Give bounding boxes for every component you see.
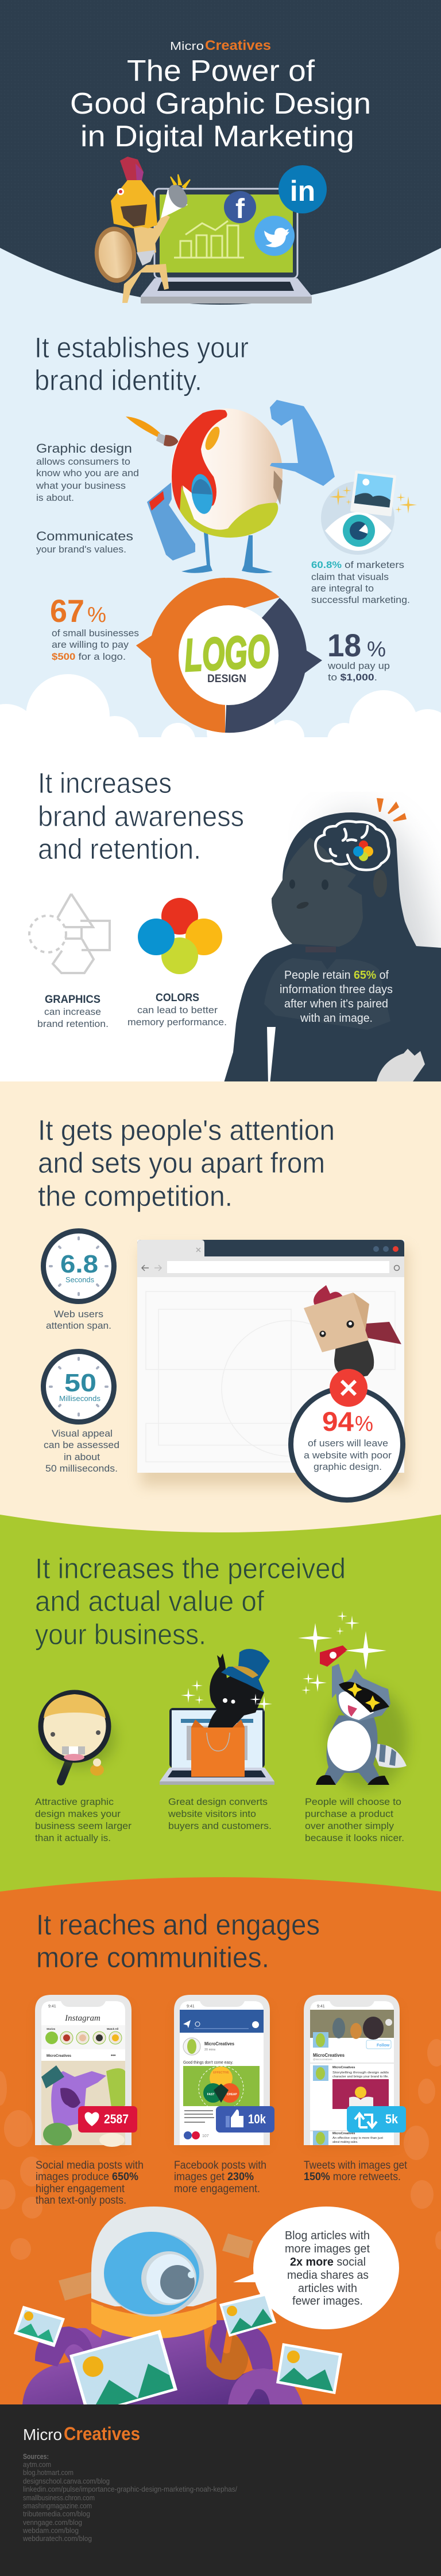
phone: facebook: CHEAP [227, 2093, 237, 2096]
phone: twitter: MicroCreatives [332, 2066, 355, 2069]
phone: twitter [304, 1995, 400, 2145]
text: social media posts: than text-only posts. [36, 2194, 126, 2207]
text: visual appeal: can be assessed [44, 1439, 119, 1450]
icon: gorilla with brain [223, 812, 441, 1090]
heading [34, 332, 249, 396]
text: visual appeal: Visual appeal [52, 1428, 113, 1439]
section background [0, 1081, 441, 1540]
phone: facebook [174, 1995, 270, 2145]
text: people retain 65% [280, 969, 393, 1025]
badge: thumbs up: 10k [248, 2112, 266, 2126]
phone: twitter: MicroCreatives [313, 2052, 345, 2058]
title: The Power of [127, 55, 315, 88]
logo: MicroCreatives: Creatives [205, 38, 271, 53]
text: colors: COLORS [156, 992, 199, 1004]
phone: facebook: 20 mins [204, 2048, 216, 2052]
speech bubble: blog articles: articles with [298, 2282, 357, 2295]
text: visual appeal: 50 milliseconds. [45, 1463, 118, 1474]
logo: MicroCreatives: Micro [170, 40, 204, 53]
sources list: webduratech.com/blog [22, 2534, 92, 2543]
panel: footer [0, 2404, 441, 2576]
text: people will choose [305, 1796, 404, 1843]
footer logo [23, 2423, 140, 2444]
text: graphic design: know who you are and [36, 468, 139, 478]
heading: brand identity. [34, 364, 202, 396]
heading: It increases the perceived [35, 1552, 346, 1585]
badge: retweets [347, 2106, 406, 2133]
phone: facebook: 107 [202, 2134, 209, 2138]
sources list: aytm.com [23, 2460, 51, 2469]
text: attractive graphic design: design makes your [35, 1808, 121, 1819]
text: graphic design: Graphic design [36, 441, 132, 456]
heading: It gets people's attention [38, 1114, 335, 1146]
clock: 6.8 seconds: Seconds [65, 1275, 94, 1284]
phone: instagram: Instagram [64, 2014, 100, 2023]
speech bubble: blog articles: fewer images. [292, 2295, 363, 2307]
icon: linkedin [278, 165, 327, 213]
icon: facebook [224, 191, 256, 224]
icon: laptop with shopping bag [160, 1649, 274, 1785]
text: great design converts: buyers and customers. [168, 1820, 272, 1831]
stat: 18%: would pay up [327, 660, 390, 671]
title: Good Graphic Design [70, 87, 371, 120]
stat: 67%: $500 for a logo. [52, 651, 126, 662]
text: people retain 65%: information three days [280, 983, 393, 996]
phone: instagram: ••• [111, 2053, 116, 2058]
icon: eye and photo [321, 470, 417, 555]
heading [38, 767, 244, 865]
icon: spartan warrior with megaphone [92, 157, 191, 303]
sources list: webdam.com/blog [22, 2526, 79, 2535]
callout: 94%: of users will leave [308, 1438, 388, 1449]
text: facebook posts: Facebook posts with [174, 2159, 266, 2172]
clouds [0, 674, 441, 771]
text: communicates [36, 529, 133, 555]
badge: thumbs up [216, 2106, 274, 2133]
icon: raccoon with bottle [298, 1611, 408, 1790]
text: people will choose: People will choose to [305, 1796, 401, 1807]
phone: instagram: Watch All [107, 2028, 118, 2030]
icon: outlined shapes [29, 894, 110, 973]
panel: attention [0, 1081, 441, 1540]
text: communicates: your brand's values. [36, 544, 126, 555]
icon: magnifying glass character [41, 1692, 115, 1781]
text: great design converts: Great design converts [168, 1796, 268, 1807]
text: visual appeal [44, 1428, 119, 1474]
text: graphics: GRAPHICS [45, 994, 100, 1006]
sources list: tributemedia.com/blog [23, 2509, 90, 2518]
text: social media posts: images produce 650% [36, 2171, 138, 2183]
icon: twitter [254, 216, 295, 256]
heading [35, 1552, 346, 1651]
text: graphics: brand retention. [37, 1018, 109, 1029]
text: attractive graphic design: business seem larger [35, 1820, 131, 1831]
clock: 50 milliseconds [44, 1352, 114, 1422]
heading: the competition. [38, 1180, 233, 1212]
icon: paper-bag character [304, 1285, 401, 1378]
text: facebook posts: images get 230% [174, 2171, 254, 2183]
phone: instagram: Stories [47, 2028, 56, 2030]
badge: retweets: 5k [385, 2112, 399, 2126]
speech bubble: blog articles: more images get [285, 2243, 370, 2255]
speech bubble: blog articles: media shares as [287, 2269, 369, 2282]
speech bubble: blog articles: 2x more social [290, 2256, 366, 2268]
phone: twitter: MicroCreatives [332, 2132, 355, 2135]
text: social media posts: higher engagement [36, 2183, 125, 2195]
phone: instagram: 9:41 [48, 2005, 56, 2009]
heading: and sets you apart from [38, 1147, 325, 1179]
heading: and actual value of [35, 1585, 264, 1617]
text: great design converts [168, 1796, 272, 1831]
sources list: smashingmagazine.com [23, 2501, 92, 2510]
phone: instagram: MicroCreatives [47, 2054, 72, 2058]
section background [0, 1515, 441, 1905]
stat: 60.8% of marketers [311, 559, 410, 605]
speech bubble: blog articles [219, 2207, 399, 2337]
heading: It increases [38, 767, 172, 799]
text: graphics [37, 994, 109, 1029]
text: colors: can lead to better [137, 1005, 218, 1015]
sources list: designschool.canva.com/blog [23, 2477, 110, 2485]
phone: facebook: MicroCreatives [204, 2041, 234, 2046]
stat: 18% [327, 627, 390, 683]
text: attractive graphic design [35, 1796, 131, 1843]
speech bubble: blog articles: Blog articles with [285, 2229, 370, 2242]
panel: brand identity [0, 332, 441, 771]
panel: header [0, 0, 441, 305]
callout: 94%: graphic design. [314, 1461, 382, 1472]
panel: communities [0, 1877, 441, 2415]
text: people will choose: because it looks nicer. [305, 1832, 404, 1843]
text: attractive graphic design: Attractive graphic [35, 1796, 114, 1807]
logo: MicroCreatives [170, 38, 271, 53]
icon: egg character with paint brush [126, 400, 335, 573]
phone: twitter: @microcreatives [313, 2058, 332, 2061]
sources list [22, 2452, 237, 2543]
text: web users: attention span. [46, 1320, 111, 1331]
heading: your business. [35, 1618, 206, 1651]
sources list: Sources: [23, 2452, 49, 2461]
phone: twitter: Follow [377, 2044, 390, 2048]
text: graphic design: allows consumers to [36, 456, 130, 467]
phone: twitter: character and brings your brand to life. [332, 2075, 389, 2079]
callout: 94%: % [355, 1412, 373, 1436]
text: communicates: Communicates [36, 529, 133, 543]
text: graphics: can increase [44, 1006, 101, 1017]
sources list: blog.hotmart.com [23, 2468, 74, 2477]
panel: brand awareness [28, 772, 441, 1081]
donut chart: logo design [136, 578, 322, 733]
text: people will choose: over another simply [305, 1820, 394, 1831]
callout: 94%: 94 [322, 1406, 354, 1437]
text: graphic design: what your business [36, 480, 126, 491]
text: colors [127, 992, 227, 1028]
browser window [137, 1240, 408, 1486]
phone: twitter: An effective copy is more than just [332, 2137, 384, 2140]
icon: linkedin: in [290, 175, 315, 207]
clock: 50 milliseconds: Milliseconds [59, 1394, 100, 1403]
badge: likes: 2587 [104, 2112, 129, 2126]
footer background [0, 2404, 441, 2576]
phone: facebook: 9:41 [187, 2005, 195, 2009]
heading: and retention. [38, 833, 201, 865]
text: tweets with images: Tweets with images get [304, 2159, 408, 2172]
icon: orange rays [377, 798, 407, 822]
stat: 67%: of small businesses [52, 628, 139, 639]
badge: likes [78, 2106, 137, 2133]
heading: more communities. [36, 1941, 269, 1974]
section background [0, 1877, 441, 2404]
phone: facebook: Good things don't come easy. [183, 2060, 233, 2065]
text: people will choose: purchase a product [305, 1808, 393, 1819]
title: in Digital Marketing [80, 120, 354, 153]
heading [38, 1114, 335, 1212]
callout: 94% [291, 1369, 403, 1500]
text: social media posts: Social media posts with [36, 2159, 144, 2172]
text: tweets with images [304, 2159, 408, 2183]
page background: light blue [0, 0, 441, 752]
text: graphic design [36, 441, 139, 503]
text: people retain 65%: People retain 65% of [284, 969, 389, 982]
clock: 50 milliseconds: 50 [64, 1369, 96, 1397]
heading [36, 1909, 320, 1974]
phone: twitter: 9:41 [317, 2005, 325, 2009]
text: tweets with images: 150% more retweets. [304, 2171, 401, 2183]
text: web users: Web users [54, 1309, 103, 1320]
sources list: venngage.com/blog [23, 2518, 82, 2527]
text: people retain 65%: with an image. [300, 1012, 373, 1025]
text: web users [46, 1309, 111, 1331]
panel: perceived value [0, 1515, 441, 1905]
footer logo: Creatives [64, 2423, 140, 2444]
clock: 6.8 seconds [44, 1231, 114, 1301]
phone: facebook: FAST [207, 2093, 214, 2096]
icon: octopus with images [14, 2207, 342, 2415]
text: great design converts: website visitors into [168, 1808, 256, 1819]
text: visual appeal: in about [64, 1452, 100, 1462]
stat: 60.8% of marketers: successful marketing. [311, 594, 410, 605]
callout: 94%: a website with poor [304, 1450, 392, 1461]
phone: twitter: about making sales. [332, 2141, 358, 2144]
stat: 18%: % [367, 637, 386, 661]
text: facebook posts: more engagement. [174, 2183, 260, 2195]
text: graphic design: is about. [36, 492, 74, 503]
donut chart: logo design: LOGO [183, 625, 271, 681]
sources list: linkedin.com/pulse/importance-graphic-design-marketing-noah-kephas/ [23, 2485, 237, 2493]
phone: twitter: Storytelling through design adds [332, 2071, 389, 2075]
heading: It establishes your [34, 332, 249, 364]
icon: laptop with chart [141, 189, 312, 303]
text: people retain 65%: after when it's paired [284, 998, 388, 1010]
sources list: smallbusiness.chron.com [23, 2493, 95, 2502]
section background [0, 749, 441, 1081]
header dark arc background [0, 0, 441, 305]
stat: 18%: 18 [327, 627, 361, 663]
donut chart: logo design: DESIGN [207, 673, 246, 685]
text: colors: memory performance. [127, 1017, 227, 1028]
heading: brand awareness [38, 800, 244, 832]
stat: 67% [50, 593, 139, 662]
phone: facebook: EFFECTIVE [213, 2071, 229, 2075]
stat: 18%: to $1,000 . [328, 672, 377, 683]
text: social media posts [36, 2159, 144, 2207]
clock: 6.8 seconds: 6.8 [60, 1250, 98, 1278]
stat: 60.8% of marketers: claim that visuals [311, 571, 389, 582]
title [70, 55, 371, 153]
footer logo: Micro [23, 2426, 62, 2443]
decorative bubbles [0, 2039, 441, 2260]
text: facebook posts [174, 2159, 266, 2195]
heading: It reaches and engages [36, 1909, 320, 1941]
stat: 67%: % [87, 603, 106, 627]
phone: instagram [35, 1995, 131, 2147]
stat: 60.8% of marketers: 60.8% of marketers [311, 559, 404, 570]
text: attractive graphic design: than it actually is. [35, 1832, 111, 1843]
stat: 60.8% of marketers: are integral to [311, 583, 374, 594]
stat: 67%: 67 [50, 593, 84, 629]
stat: 67%: are willing to pay [52, 639, 129, 650]
icon: facebook: f [235, 194, 245, 224]
icon: color circles [138, 898, 222, 974]
